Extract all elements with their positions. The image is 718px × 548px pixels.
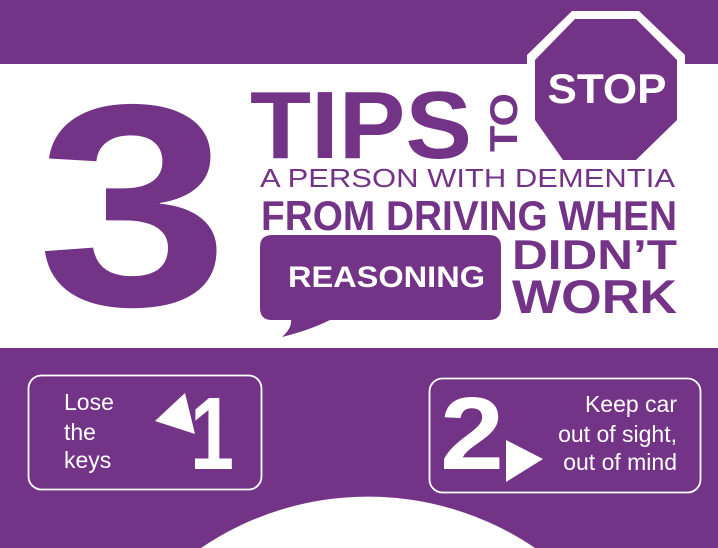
title: didn't: DIDN’T (512, 231, 677, 278)
panel: tip 1: Lose (64, 389, 114, 415)
top purple band (0, 0, 718, 64)
title: from driving when: FROM DRIVING WHEN (261, 192, 677, 239)
white circle (tip 3 start) (201, 497, 535, 548)
speech bubble: reasoning (260, 235, 501, 337)
icon: stop sign: STOP (548, 65, 666, 112)
panel: tip 2 (430, 376, 700, 492)
panel: tip 1: 1 (190, 376, 234, 491)
panel: tip 2: 2 (440, 376, 504, 491)
title: TO rotated: TO (483, 93, 526, 152)
panel: tip 1 (28, 376, 262, 491)
panel: tip 1: the (64, 419, 96, 445)
panel: tip 2: Keep car (585, 391, 677, 417)
panel: tip 1: keys (64, 447, 111, 473)
subtitle: a person with dementia: A PERSON WITH DEMENTIA (260, 163, 676, 193)
icon: stop sign (527, 11, 685, 165)
title: work: WORK (512, 270, 677, 323)
title: TIPS: TIPS (250, 72, 472, 179)
panel: tip 2: out of mind (563, 449, 677, 475)
bottom purple section (0, 348, 718, 548)
big number 3: 3 (37, 45, 229, 367)
panel: tip 2: out of sight, (558, 421, 677, 447)
speech bubble: reasoning: REASONING (288, 261, 485, 294)
